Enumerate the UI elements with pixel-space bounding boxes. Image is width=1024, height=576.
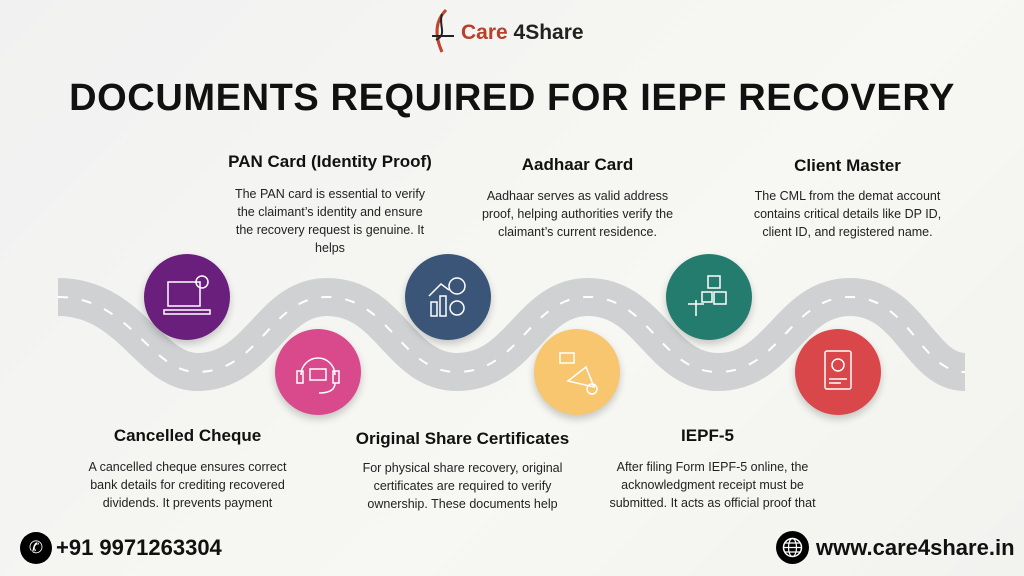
- text: PAN Card: [228, 152, 432, 255]
- icon: laptop (purple): [144, 254, 230, 340]
- text: Aadhaar: Aadhaar Card: [522, 155, 633, 174]
- text: Client Master: Client Master: [794, 156, 901, 175]
- phone contact: +91 9971263304: [56, 535, 222, 560]
- text: PAN Card: The PAN card is essential to verify the claimant’s identity and ensure the recovery request is genuine. It helps: [235, 187, 425, 255]
- website contact: www.care4share.in: [816, 535, 1015, 560]
- text: Original Share Certificates: Original Share Certificates: [356, 429, 569, 448]
- text: IEPF-5: [609, 426, 816, 510]
- text: Client Master: [754, 156, 941, 239]
- logo: Care 4Share: [461, 21, 584, 44]
- icon: contact book (red): [795, 329, 881, 415]
- phone contact: [20, 532, 222, 564]
- icon: megaphone (yellow): [534, 329, 620, 415]
- website contact: [776, 531, 1015, 564]
- text: Cancelled Cheque: A cancelled cheque ensures correct bank details for crediting recovered dividends. It prevents payment: [88, 460, 287, 510]
- text: Cancelled Cheque: Cancelled Cheque: [114, 426, 261, 445]
- text: Aadhaar: [482, 155, 673, 239]
- logo: [432, 9, 584, 53]
- phone contact: ✆: [29, 538, 43, 557]
- text: Cancelled Cheque: [88, 426, 287, 510]
- text: PAN Card: PAN Card (Identity Proof): [228, 152, 432, 171]
- text: Client Master: The CML from the demat account contains critical details like DP ID, client ID, and registered name.: [754, 189, 941, 239]
- text: IEPF-5: After filing Form IEPF-5 online, the acknowledgment receipt must be submitted. It acts as official proof that: [609, 460, 816, 510]
- text: Aadhaar: Aadhaar serves as valid address proof, helping authorities verify the claimant’s current residence.: [482, 189, 673, 239]
- text: IEPF-5: IEPF-5: [681, 426, 734, 445]
- text: Original Share Certificates: [356, 429, 569, 511]
- icon: cubes (teal): [666, 254, 752, 340]
- title: DOCUMENTS REQUIRED FOR IEPF RECOVERY: [69, 77, 955, 119]
- icon: chart (navy): [405, 254, 491, 340]
- icon: headset (pink): [275, 329, 361, 415]
- text: Original Share Certificates: For physical share recovery, original certificates are required to verify ownership. These documents help: [363, 461, 562, 511]
